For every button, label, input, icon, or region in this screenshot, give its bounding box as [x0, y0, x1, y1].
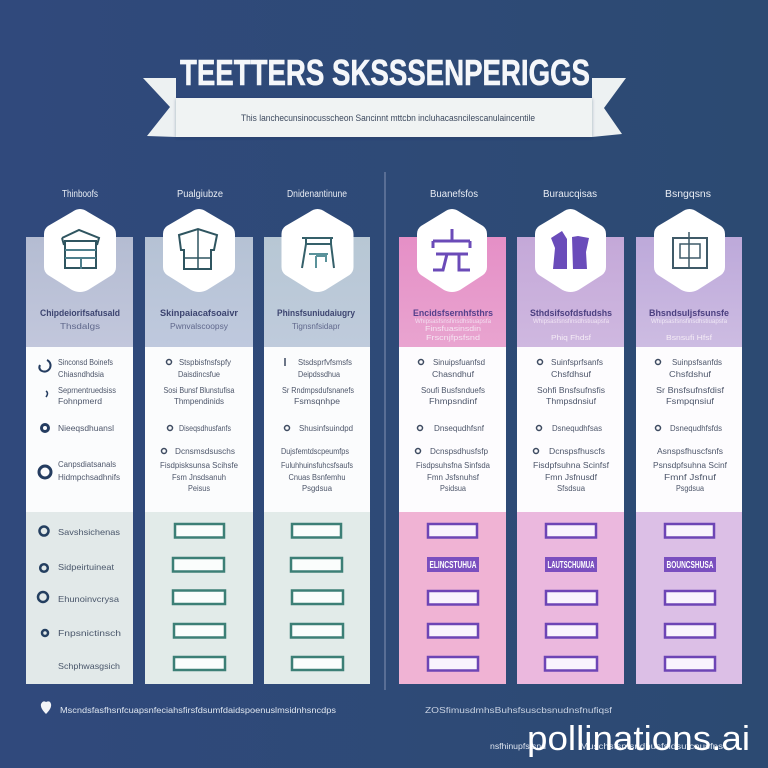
feature list: Fisdpisksunsa Scihsfe — [160, 461, 239, 470]
feature list: Canpsdiatsanals — [58, 460, 116, 469]
feature list: Psgdsua — [676, 484, 704, 493]
feature list: Nieeqsdhuansl — [58, 424, 114, 433]
header text: Whipsasfsnsfinsdhstiuapsfa — [651, 319, 728, 325]
column 3 — [264, 189, 370, 684]
hexagon icon badge — [417, 209, 487, 292]
feature list: Fmn Jsfsnuhsf — [427, 473, 480, 482]
column label: Thinboofs — [62, 189, 98, 200]
list markers — [416, 360, 424, 454]
feature list: Fsmsqnhpe — [294, 397, 341, 406]
white feature panel — [26, 347, 133, 512]
feature list: Fmn Jsfnusdf — [545, 473, 598, 482]
header text: Encidsfsernhfsthrs — [413, 308, 493, 318]
bottom row labels: Sidpeirtuineat — [58, 562, 115, 572]
title: TEETTERS SKSSSENPERIGGS — [180, 52, 590, 93]
feature list: Seprnentruedsiss — [58, 386, 116, 395]
option box with text: ELINCSTUHUA — [430, 560, 476, 571]
header text: Chipdeiorifsafusald — [40, 308, 120, 318]
header text: Frscnjfpsfsnd — [426, 335, 480, 342]
feature list: Chiasndhdsia — [58, 370, 105, 379]
feature list: Dcnsmsdsuschs — [175, 447, 235, 456]
column 5 — [517, 189, 624, 684]
option boxes — [173, 524, 225, 670]
header text — [649, 308, 729, 342]
feature list: Fsm Jnsdsanuh — [172, 473, 226, 482]
feature list: Fmnf Jsfnuf — [664, 473, 717, 482]
feature list: Daisdincsfue — [178, 370, 220, 379]
bottom row labels: Ehunoinvcrysa — [58, 594, 119, 604]
header text — [530, 308, 612, 342]
option box with text: BOUNCSHUSA — [666, 560, 714, 571]
bottom row labels — [58, 527, 121, 671]
feature list: Sr Bnsfsufnsfdisf — [656, 386, 725, 395]
feature list: Sinconsd Boinefs — [58, 358, 113, 367]
option boxes — [291, 524, 343, 670]
feature list: Sr Rndmpsdufsnanefs — [282, 386, 354, 395]
option box with text: LAUTSCHUMUA — [548, 560, 594, 571]
hexagon icon badge — [535, 209, 606, 292]
option box with text — [664, 557, 716, 572]
bottom panel — [26, 512, 133, 684]
bottom panel — [145, 512, 253, 684]
feature list: Dnsequdhfsnf — [434, 424, 485, 433]
option box with text — [545, 557, 597, 572]
bottom panel — [399, 512, 506, 684]
white feature panel — [517, 347, 624, 512]
header text: Pwnvalscoopsy — [170, 322, 228, 331]
column label: Buanefsfos — [430, 189, 478, 200]
feature list: Deipdssdhua — [298, 370, 340, 379]
feature list: Asnspsfhuscfsnfs — [657, 447, 723, 456]
footer credit left: nsfhinupfsfsnd — [490, 742, 546, 751]
header text — [40, 308, 120, 331]
feature list: Psgdsua — [302, 484, 333, 493]
icon: gate — [302, 238, 334, 268]
icon: garment — [179, 229, 217, 269]
icon: heart — [41, 701, 51, 714]
feature list: Stspbisfnsfspfy — [179, 358, 231, 367]
column label: Pualgiubze — [177, 189, 223, 200]
footer credit right: Muschsfsnfsndhusfsidsufcnusfns — [580, 742, 723, 751]
bottom row labels: Fnpsnictinsch — [58, 628, 121, 638]
header text: Phinsfsuniudaiugry — [277, 308, 355, 318]
icon: purple garment — [551, 231, 589, 269]
header text: Bsnsufi Hfsf — [666, 335, 712, 342]
feature list: Chsfdshuf — [669, 370, 712, 379]
option box with text — [427, 557, 479, 572]
feature list — [160, 358, 239, 493]
subtitle: This lanchecunsinocusscheon Sancinnt mttcbn incluhacasncilescanulaincentile — [241, 113, 535, 123]
header text: Thsdalgs — [60, 322, 100, 331]
feature list: Dsnequdhfsas — [552, 424, 602, 433]
footer — [41, 701, 750, 758]
feature list: Dcnspsfhuscfs — [549, 447, 605, 456]
bottom row icons — [38, 526, 48, 636]
column 4 — [399, 189, 506, 684]
footnote left: Mscndsfasfhsnfcuapsnfeciahsfirsfdsumfdaidspoenuslmsidnhsncdps — [60, 706, 336, 715]
feature list: Psidsua — [440, 484, 466, 493]
header panel — [26, 237, 133, 347]
icon: building — [62, 230, 99, 269]
header panel — [517, 237, 624, 347]
column label: Dnidenantinune — [287, 189, 347, 200]
header text: Finsfuasinsdin — [425, 326, 481, 333]
icon: frame — [672, 232, 708, 268]
white feature panel — [264, 347, 370, 512]
bottom row labels: Savshsichenas — [58, 527, 120, 537]
feature list: Cnuas Bsnfemhu — [288, 473, 346, 482]
feature list: Hidmpchsadhnifs — [58, 473, 120, 482]
feature list: Sinuipsfuanfsd — [433, 358, 485, 367]
feature list: Soufi Busfsnduefs — [421, 386, 485, 395]
feature list: Shusinfsuindpd — [299, 424, 353, 433]
feature list — [533, 358, 610, 493]
option boxes — [545, 524, 597, 670]
feature list: Dujsfemtdscpeumfps — [281, 447, 349, 456]
white feature panel — [399, 347, 506, 512]
header panel — [399, 237, 506, 347]
hexagon icon badge — [163, 209, 235, 292]
ribbon band — [176, 98, 592, 137]
feature list: Chasndhuf — [432, 370, 475, 379]
feature list: Chsfdhsuf — [551, 370, 592, 379]
header text — [413, 308, 493, 342]
feature list — [281, 358, 354, 493]
feature list: Suinfsprfsanfs — [551, 358, 603, 367]
feature list: Fuluhhuinsfuhcsfsaufs — [281, 461, 353, 470]
option boxes — [428, 524, 478, 670]
list markers — [162, 360, 172, 454]
list markers — [534, 360, 542, 454]
column 2 — [145, 189, 253, 684]
feature list: Fohnpmerd — [58, 397, 102, 406]
header text — [277, 308, 355, 331]
feature list: Stsdsprfvfsmsfs — [298, 358, 352, 367]
bottom panel — [517, 512, 624, 684]
feature list: Thmpendinids — [174, 397, 224, 406]
feature list: Peisus — [188, 484, 210, 493]
hexagon icon badge — [44, 209, 116, 292]
header text — [160, 308, 238, 331]
white feature panel — [145, 347, 253, 512]
icon: pavilion — [433, 229, 470, 270]
column label: Buraucqisas — [543, 189, 597, 200]
column 6 — [636, 189, 742, 684]
ribbon tail: left — [143, 78, 176, 137]
feature list — [58, 358, 120, 482]
header text: Tignsnfsidapr — [292, 322, 340, 331]
feature list: Fhmpsndinf — [429, 397, 478, 406]
feature list: Dcnspsdhusfsfp — [430, 447, 489, 456]
list markers — [656, 360, 660, 430]
feature list — [416, 358, 491, 493]
feature list: Fisdpsuhsfna Sinfsda — [416, 461, 491, 470]
footnote right: ZOSfimusdmhsBuhsfsuscbsnudnsfnufiqsf — [425, 706, 613, 715]
header text: Sthdsifsofdsfudshs — [530, 308, 612, 318]
watermark: pollinations.ai — [527, 720, 750, 758]
feature list — [653, 358, 728, 493]
title banner — [143, 52, 626, 137]
feature list: Psnsdpfsuhna Scinf — [653, 461, 728, 470]
feature list: Fsmpqnsiuf — [666, 397, 715, 406]
list markers — [284, 358, 290, 430]
header panel — [145, 237, 253, 347]
bottom panel — [636, 512, 742, 684]
feature list: Sohfi Bnsfsufnsfis — [537, 386, 605, 395]
header text: Whipsasfsnsfinsdhstiuapsfa — [415, 319, 492, 325]
header text: Phiq Fhdsf — [551, 335, 591, 342]
header text: Skinpaiacafsoaivr — [160, 308, 238, 318]
feature list: Fisdpfsuhna Scinfsf — [533, 461, 610, 470]
hexagon icon badge — [282, 209, 354, 292]
feature list: Diseqsdhusfanfs — [179, 424, 231, 433]
feature list: Dsnequdhfsfds — [670, 424, 722, 433]
column 1 — [26, 189, 133, 684]
list icons — [39, 360, 51, 478]
column label: Bsngqsns — [665, 189, 711, 200]
header panel — [264, 237, 370, 347]
option boxes — [665, 524, 715, 670]
bottom row labels: Schphwasgsich — [58, 661, 120, 671]
feature list: Suinpsfsanfds — [672, 358, 722, 367]
header text: Bhsndsuljsfsunsfe — [649, 308, 729, 318]
header panel — [636, 237, 742, 347]
hexagon icon badge — [654, 209, 725, 292]
header text: Whipsasfsnsfinsdhstiuapsfa — [533, 319, 610, 325]
ribbon tail: right — [592, 78, 626, 137]
feature list: Sfsdsua — [557, 484, 586, 493]
white feature panel — [636, 347, 742, 512]
feature list: Thmpsdnsiuf — [546, 397, 597, 406]
feature list: Sosi Bunsf Blunstufisa — [164, 386, 235, 395]
bottom panel — [264, 512, 370, 684]
